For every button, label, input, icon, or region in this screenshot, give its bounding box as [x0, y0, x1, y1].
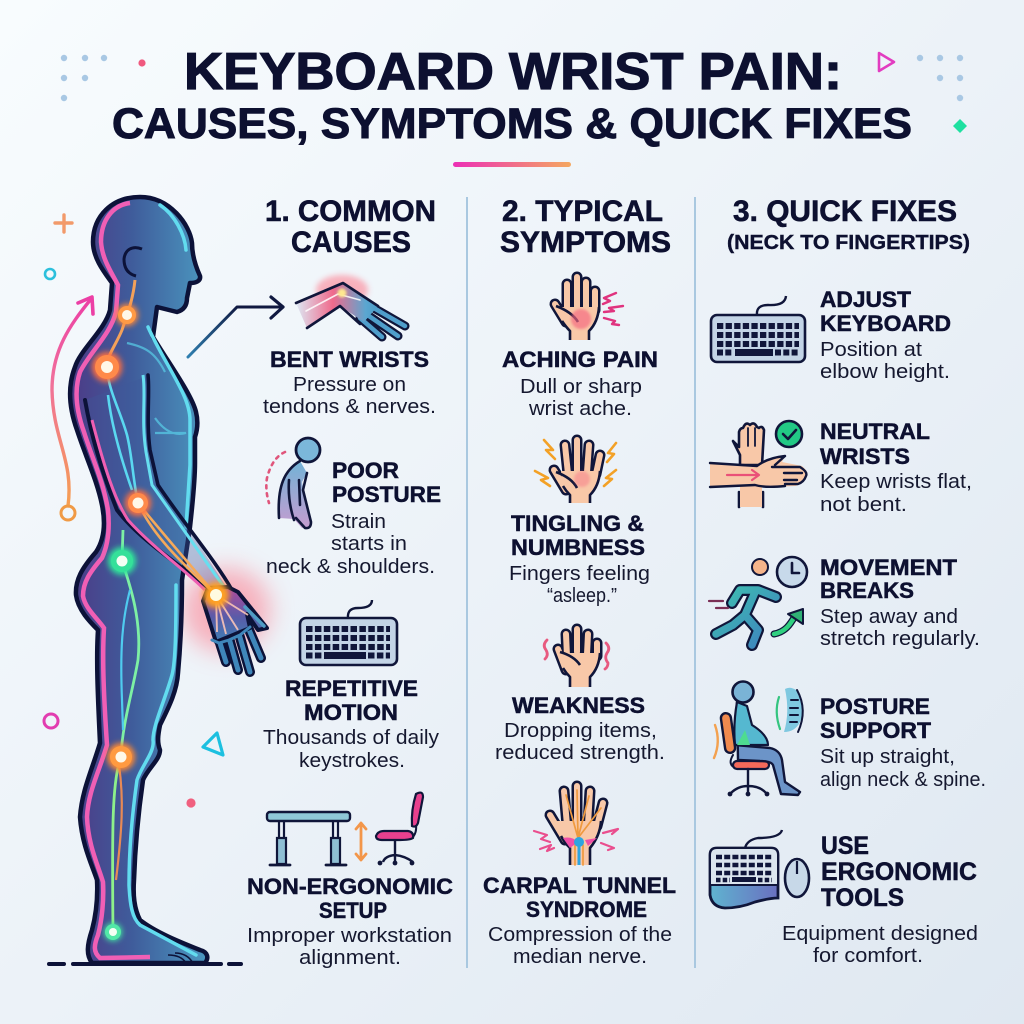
- decorative pink triangle: [879, 53, 894, 71]
- text: poor posture: Strain: [331, 511, 386, 533]
- hand: [203, 587, 267, 672]
- toes: [168, 953, 193, 963]
- text: posture support: [820, 694, 986, 791]
- text: use ergonomic tools: ERGONOMIC: [821, 858, 977, 886]
- icon: weak hand: [544, 629, 609, 687]
- text: tingling and numbness: “asleep.”: [547, 585, 617, 607]
- text: posture support: Sit up straight,: [820, 746, 955, 768]
- title: CAUSES, SYMPTOMS & QUICK FIXES: [112, 100, 912, 148]
- text: non-ergonomic setup: NON-ERGONOMIC: [247, 874, 453, 899]
- title: [112, 43, 912, 148]
- ground line: [49, 962, 241, 966]
- text: non-ergonomic setup: SETUP: [319, 898, 387, 923]
- text: posture support: align neck & spine.: [820, 769, 986, 791]
- text: movement breaks: Step away and: [820, 606, 958, 628]
- cyan front contour: [129, 205, 196, 955]
- text: bent wrists: tendons & nerves.: [263, 396, 436, 418]
- icon: keyboard: [300, 600, 397, 665]
- glow point: elbow: [125, 490, 151, 516]
- text: weakness: [495, 693, 665, 764]
- human figure: [70, 197, 270, 963]
- text: repetitive motion: keystrokes.: [299, 750, 405, 772]
- text: bent wrists: BENT WRISTS: [270, 347, 429, 372]
- heading: common causes: [265, 195, 436, 259]
- text: tingling and numbness: NUMBNESS: [511, 535, 645, 560]
- decorative dots right: [917, 55, 963, 101]
- heading: typical symptoms: [500, 195, 671, 259]
- icon: desk and chair: [267, 793, 423, 865]
- heading: common causes: 1. COMMON: [265, 195, 436, 228]
- text: poor posture: starts in: [331, 533, 407, 555]
- title underline: [453, 162, 571, 167]
- icon: movement breaks: [709, 557, 807, 645]
- text: movement breaks: MOVEMENT: [820, 555, 958, 580]
- text: use ergonomic tools: for comfort.: [813, 945, 923, 967]
- decorative cyan ring: [45, 269, 55, 279]
- icon: neutral wrists: [710, 421, 807, 507]
- text: neutral wrists: NEUTRAL: [820, 419, 930, 444]
- glow point: neck: [116, 304, 138, 326]
- text: aching pain: wrist ache.: [528, 398, 632, 420]
- hand tendons: [216, 595, 248, 634]
- text: carpal tunnel syndrome: [483, 873, 676, 968]
- heading: quick fixes: (NECK TO FINGERTIPS): [727, 232, 970, 254]
- text: poor posture: POOR: [332, 458, 399, 483]
- text: adjust keyboard: ADJUST: [820, 287, 912, 312]
- text: carpal tunnel syndrome: CARPAL TUNNEL: [483, 873, 676, 898]
- text: repetitive motion: Thousands of daily: [263, 727, 439, 749]
- heading: quick fixes: 3. QUICK FIXES: [733, 195, 957, 228]
- text: aching pain: ACHING PAIN: [502, 347, 658, 372]
- heading: common causes: CAUSES: [291, 226, 411, 259]
- text: use ergonomic tools: Equipment designed: [782, 923, 978, 945]
- decorative pink ring: [44, 714, 58, 728]
- decorative cyan triangle: [203, 733, 223, 755]
- text: use ergonomic tools: USE: [821, 832, 869, 860]
- icon: poor posture: [266, 438, 320, 528]
- text: tingling and numbness: [509, 511, 650, 607]
- icon: ergonomic tools: [710, 830, 809, 908]
- text: aching pain: [502, 347, 658, 420]
- ear: [124, 248, 142, 276]
- heading: quick fixes: [727, 195, 970, 254]
- icon: posture support: [714, 682, 803, 796]
- text: tingling and numbness: TINGLING &: [511, 511, 644, 536]
- text: poor posture: neck & shoulders.: [266, 556, 435, 578]
- nerve lines: [107, 280, 135, 367]
- text: aching pain: Dull or sharp: [520, 376, 642, 398]
- arm: [85, 375, 230, 593]
- chest detail: [127, 343, 186, 434]
- text: posture support: POSTURE: [820, 694, 930, 719]
- text: carpal tunnel syndrome: SYNDROME: [526, 897, 647, 922]
- curved upward arrow: [52, 297, 93, 520]
- pointer arrow to bent wrist: [188, 297, 283, 357]
- column divider 1: [466, 197, 468, 968]
- text: movement breaks: [820, 555, 980, 650]
- text: adjust keyboard: elbow height.: [820, 361, 950, 383]
- text: repetitive motion: [263, 676, 439, 772]
- icon: bent wrist: [296, 275, 405, 337]
- text: adjust keyboard: KEYBOARD: [820, 311, 951, 336]
- text: repetitive motion: REPETITIVE: [285, 676, 418, 701]
- text: neutral wrists: not bent.: [820, 494, 907, 516]
- decorative coral dot: [186, 798, 196, 808]
- icon: adjust keyboard: [711, 296, 805, 362]
- wrist pain glow: [182, 568, 270, 652]
- text: weakness: reduced strength.: [495, 742, 665, 764]
- glow point: ankle: [104, 923, 122, 941]
- text: tingling and numbness: Fingers feeling: [509, 563, 650, 585]
- panel: quick fixes: [709, 195, 986, 967]
- heading: typical symptoms: SYMPTOMS: [500, 226, 671, 259]
- text: neutral wrists: WRISTS: [820, 444, 910, 469]
- panel: common causes: [247, 195, 453, 969]
- icon: aching hand: [555, 277, 623, 340]
- text: adjust keyboard: [820, 287, 951, 383]
- text: non-ergonomic setup: alignment.: [299, 947, 401, 969]
- text: posture support: SUPPORT: [820, 718, 932, 743]
- text: neutral wrists: [820, 419, 972, 516]
- glow point: hip: [108, 547, 136, 575]
- text: carpal tunnel syndrome: median nerve.: [513, 946, 647, 968]
- glow point: wrist: [203, 582, 229, 608]
- text: bent wrists: Pressure on: [293, 374, 406, 396]
- text: use ergonomic tools: [782, 832, 978, 967]
- panel: typical symptoms: [483, 195, 676, 968]
- pink back contour: [77, 203, 150, 958]
- decorative green diamond: [953, 119, 967, 133]
- text: non-ergonomic setup: [247, 874, 453, 969]
- text: movement breaks: stretch regularly.: [820, 628, 980, 650]
- body silhouette: [70, 197, 207, 963]
- text: non-ergonomic setup: Improper workstation: [247, 925, 452, 947]
- text: use ergonomic tools: TOOLS: [821, 884, 904, 912]
- text: adjust keyboard: Position at: [820, 339, 922, 361]
- icon: tingling hand: [535, 440, 616, 503]
- decorative red dot: [138, 59, 146, 67]
- text: poor posture: [266, 458, 441, 578]
- title: KEYBOARD WRIST PAIN:: [184, 43, 842, 101]
- heading: typical symptoms: 2. TYPICAL: [502, 195, 663, 228]
- glow point: knee: [107, 743, 135, 771]
- text: weakness: WEAKNESS: [512, 693, 645, 718]
- text: carpal tunnel syndrome: Compression of the: [488, 924, 672, 946]
- text: movement breaks: BREAKS: [820, 578, 914, 603]
- glow point: shoulder: [92, 352, 122, 382]
- column divider 2: [694, 197, 696, 968]
- text: bent wrists: [263, 347, 436, 418]
- decorative dots left: [61, 55, 107, 101]
- decorative orange plus: [55, 215, 72, 232]
- text: neutral wrists: Keep wrists flat,: [820, 471, 972, 493]
- text: repetitive motion: MOTION: [304, 700, 398, 725]
- text: weakness: Dropping items,: [504, 720, 657, 742]
- text: poor posture: POSTURE: [332, 482, 441, 507]
- icon: carpal tunnel hand: [534, 786, 618, 865]
